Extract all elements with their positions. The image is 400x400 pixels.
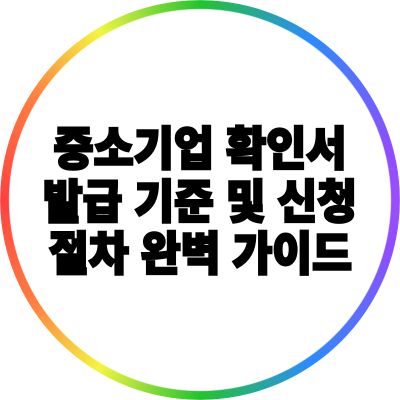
title line 1: 중소기업 확인서 [54, 123, 346, 175]
title line 3: 절차 완벽 가이드 [49, 228, 352, 280]
title line 2: 발급 기준 및 신청 [43, 176, 357, 228]
